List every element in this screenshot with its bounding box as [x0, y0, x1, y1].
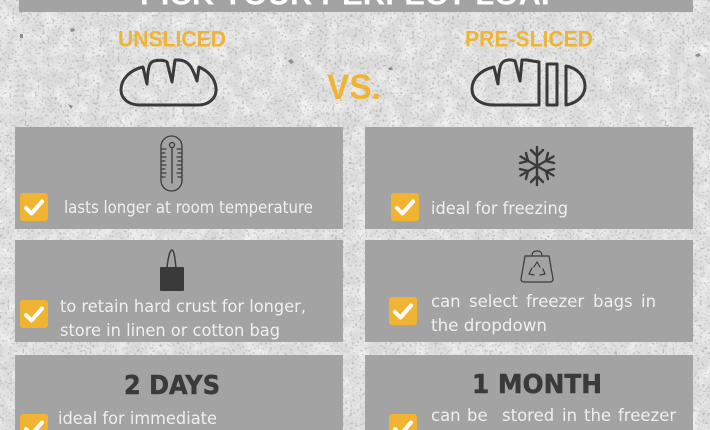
panel: pre-sliced freezing	[365, 127, 693, 229]
heading: 2 days: 2 DAYS	[124, 371, 220, 401]
heading: unsliced: UNSLICED	[118, 26, 226, 52]
panel: unsliced shelf life	[15, 355, 343, 430]
text: bags	[593, 292, 633, 311]
text: lasts longer at room temperature	[64, 198, 313, 217]
checkbox	[20, 193, 48, 221]
icon: recycling bag	[521, 251, 553, 282]
text: the	[584, 406, 611, 425]
panel: unsliced storage	[15, 240, 343, 342]
icon: whole loaf	[121, 60, 216, 105]
vs label: VS.	[327, 68, 381, 107]
text: store in linen or cotton bag	[60, 321, 280, 340]
text: ideal for immediate	[58, 409, 217, 428]
panel: unsliced room temperature	[15, 127, 343, 229]
text: to retain hard crust for longer,	[60, 297, 306, 316]
text: freezer	[618, 406, 676, 425]
heading: 1 month: 1 MONTH	[472, 370, 602, 400]
icon: thermometer	[161, 136, 182, 191]
icon: snowflake	[520, 147, 554, 185]
heading: pre-sliced: PRE-SLICED	[465, 26, 593, 52]
text: stored	[502, 406, 554, 425]
checkbox	[20, 414, 48, 430]
text: in	[641, 292, 656, 311]
text: ideal for freezing	[431, 199, 568, 218]
text	[60, 297, 306, 340]
icon: tote bag	[160, 250, 184, 291]
text: freezer	[526, 292, 584, 311]
checkbox	[391, 193, 419, 221]
title banner	[19, 0, 693, 12]
panel: pre-sliced storage	[365, 240, 693, 342]
checkbox	[389, 297, 417, 325]
text: select	[469, 292, 519, 311]
checkbox	[389, 414, 417, 430]
icon: sliced loaf	[472, 60, 585, 105]
checkbox	[20, 300, 48, 328]
text: the dropdown	[431, 316, 547, 335]
text: in	[562, 406, 577, 425]
text: can	[431, 406, 461, 425]
text	[431, 292, 656, 335]
text: can	[431, 292, 461, 311]
text: be	[467, 406, 488, 425]
panel: pre-sliced shelf life	[365, 355, 693, 430]
